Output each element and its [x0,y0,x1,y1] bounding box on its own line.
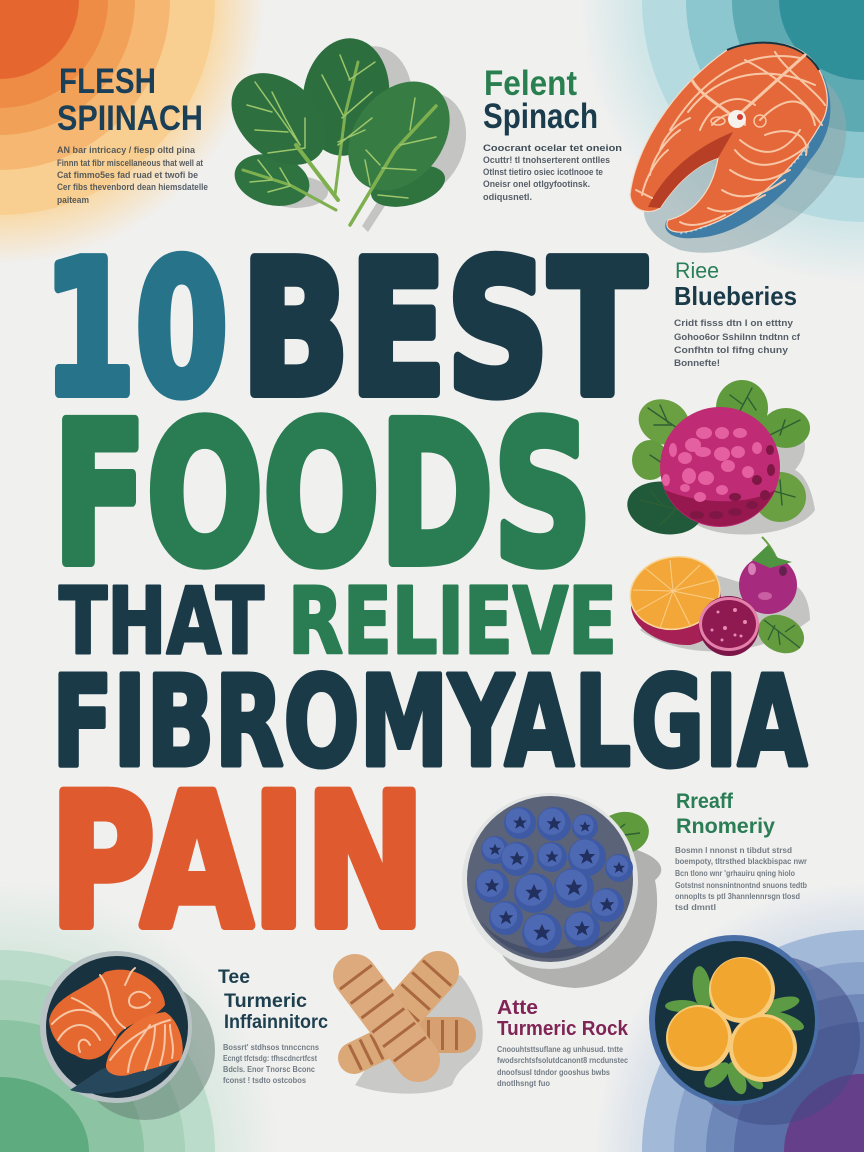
heading: Blueberies [674,281,797,311]
body text: Cridt fisss dtn l on etttny [674,318,793,328]
block: Flesh Spinach [57,62,208,205]
body text: Bonnefte! [674,358,720,368]
heading: FLESH [59,62,156,101]
body text: onnoplts ts ptl 3hannlennrsgn tlosd [675,891,800,901]
body text: tsd dmntl [675,902,716,912]
heading [218,967,328,1033]
icon: orange slices bowl [649,935,860,1125]
heading [676,790,775,838]
heading: Turmeric Rock [497,1018,629,1040]
body text: dnoofsusl tdndor gooshus bwbs [497,1067,610,1077]
icon: salmon in bowl [40,951,215,1120]
heading: Riee [675,258,719,283]
body text: Oneisr onel otlgyfootinsk. [483,179,590,189]
body text [674,318,801,368]
heading [57,62,203,138]
icon: ginger root [354,972,483,1094]
heading [497,997,629,1040]
title line: THAT RELIEVE: THAT [59,568,264,675]
corner rings: blue purple [594,882,864,1152]
icon: blueberry bowl [462,793,661,988]
heading: Inffainnitorc [224,1012,328,1033]
body text: Cnoouhtsttsuflane ag unhusud. tntte [497,1044,623,1054]
heading [674,258,797,311]
body text: Bcn tlono wnr 'grhauiru qning hiolo [675,868,795,878]
block: Tee Turmeric Inflamnitorc [218,967,328,1085]
corner rings: green [0,880,278,1152]
body text: Cat fimmo5es fad ruad et twofi be [57,170,198,180]
body text: Bdcls. Enor Tnorsc Bconc [223,1064,315,1074]
body text: Cer fibs thevenbord dean hiemsdatelle [57,182,208,192]
body text [57,145,208,205]
body text [483,143,622,202]
body text: paiteam [57,195,89,205]
body text: Ocuttr! tl tnohserterent ontlles [483,155,610,165]
title line: 10 BEST [43,221,646,437]
icon: salmon steak [630,43,846,253]
body text: Otlnst tietiro osiec icotlnooe te [483,167,603,177]
heading: Turmeric [224,991,307,1012]
body text: Coocrant ocelar tet oneion [483,143,622,153]
body text: fwodsrchtsfsolutdcanont8 rncdunstec [497,1055,628,1065]
body text: Bossrt' stdhsos tnnccncns [223,1042,319,1052]
title line: THAT RELIEVE [59,568,617,675]
heading: Rnomeriy [676,815,775,838]
title line: FOODS: FOODS [53,381,592,608]
heading: Atte [497,997,538,1019]
corner rings: teal [579,0,864,285]
block: Rreaff Rnomeriy [675,790,808,912]
block: Atte Turmeric Root [497,997,629,1088]
title line: 10 BEST: BEST [241,221,646,437]
body text: Ecngt tfctsdg: tfhscdncrtfcst [223,1053,317,1063]
title line: PAIN: PAIN [50,756,425,969]
body text: boempoty, tltrsthed blackbispac nwr [675,856,808,866]
body text: Gohoo6or Sshilnn tndtnn cf [674,332,801,342]
icon: spinach [213,33,487,232]
title [43,221,807,969]
body text: odiqusnetl. [483,192,532,202]
icon: orange and beet [624,537,810,660]
heading: SPIINACH [57,99,203,138]
body text: Confhtn tol fifng chuny [674,345,788,355]
block: Riee Blueberies [674,258,801,368]
block: Felent Spinach [483,64,622,202]
body text: dnotlhsngt fuo [497,1078,550,1088]
heading: Felent [484,64,577,103]
title line: THAT RELIEVE: RELIEVE [288,568,617,675]
body text [675,845,808,912]
body text: Bosmn l nnonst n tibdut strsd [675,845,792,855]
body text: Gotstnst nonsnintnontnd snuons tedtb [675,880,807,890]
heading: Spinach [483,97,598,136]
body text: Finnn tat fibr miscellaneous that well at [57,158,203,168]
corner rings: orange [0,0,265,265]
body text: fconst ! tsdto ostcobos [223,1075,306,1085]
body text [223,1042,319,1085]
heading [483,64,598,136]
icon: raspberry with leaves [623,380,815,540]
heading: Tee [218,967,250,988]
body text: AN bar intricacy / fiesp oltd pina [57,145,196,155]
heading: Rreaff [676,790,734,813]
body text [497,1044,628,1088]
title line: 10 BEST: 10 [43,221,228,437]
